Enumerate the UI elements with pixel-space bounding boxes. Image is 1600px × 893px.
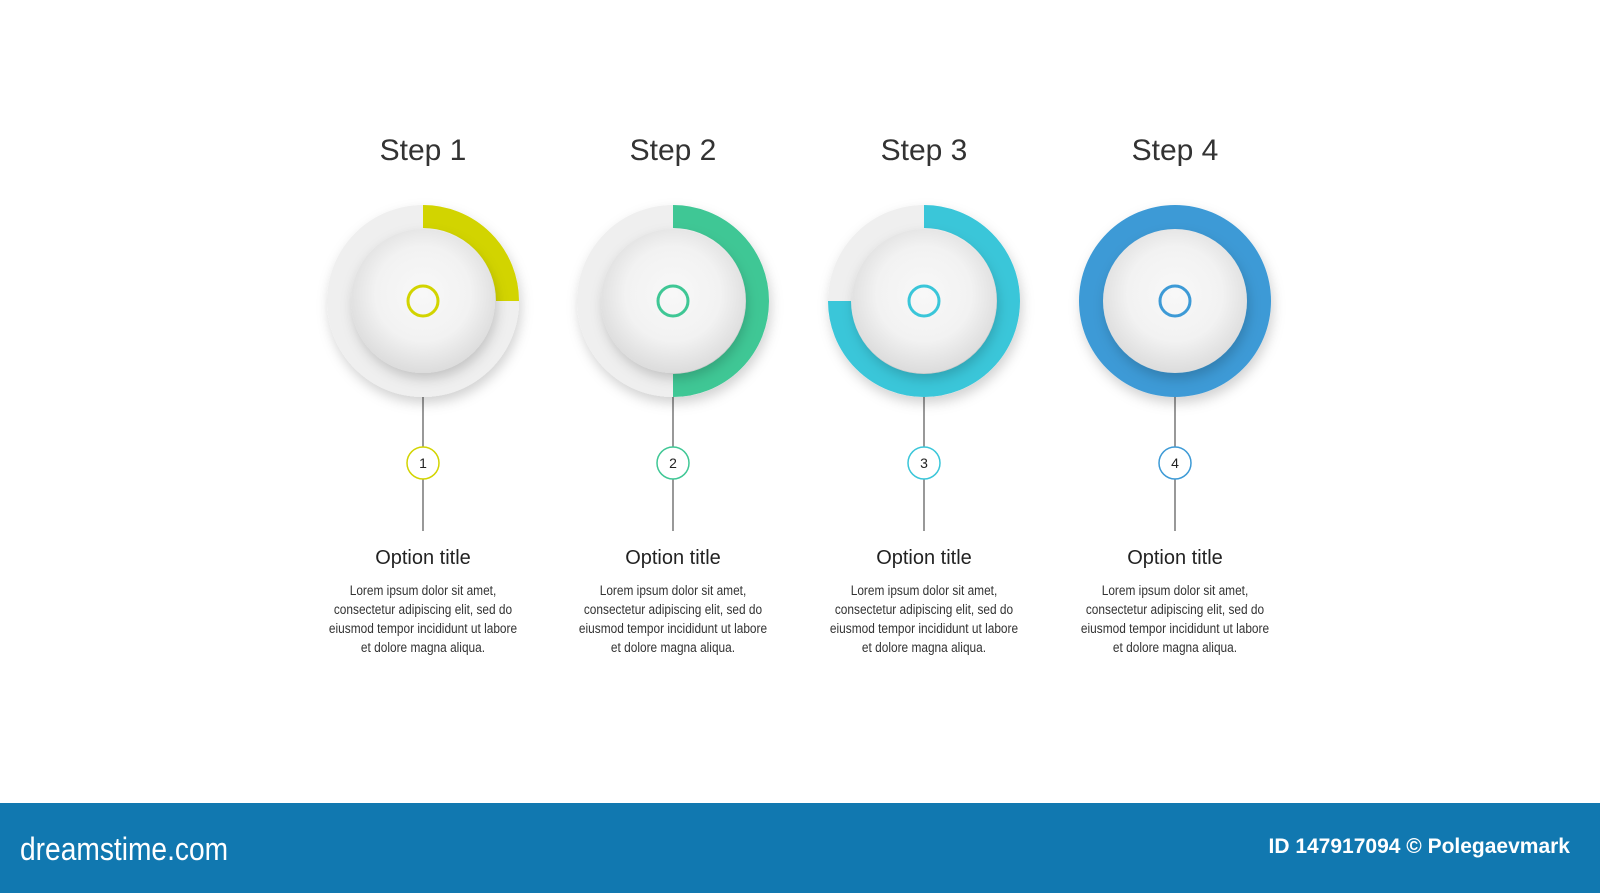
number badges: 4: [1171, 455, 1179, 471]
text: eiusmod tempor incididunt ut labore: [579, 621, 767, 636]
image id: ID 147917094 © Polegaevmark: [1268, 835, 1570, 858]
text: consectetur adipiscing elit, sed do: [1086, 602, 1264, 617]
body texts: [329, 583, 1269, 655]
text: Step 3: [881, 134, 967, 167]
connector lines: [423, 397, 1175, 531]
footer bar: [0, 803, 1600, 893]
circle 3: [828, 205, 1020, 397]
text: Step 2: [630, 134, 716, 167]
text: Option title: [876, 547, 972, 569]
circle 2: [577, 205, 769, 397]
text: et dolore magna aliqua.: [862, 640, 986, 655]
text: et dolore magna aliqua.: [611, 640, 735, 655]
step titles: [380, 134, 1218, 167]
text: eiusmod tempor incididunt ut labore: [1081, 621, 1269, 636]
option titles: [375, 547, 1223, 569]
number badges: 3: [920, 455, 928, 471]
text: Option title: [375, 547, 471, 569]
logo text: dreamstime.com: [20, 831, 228, 867]
text: consectetur adipiscing elit, sed do: [584, 602, 762, 617]
text: Option title: [1127, 547, 1223, 569]
text: Lorem ipsum dolor sit amet,: [600, 583, 746, 598]
text: eiusmod tempor incididunt ut labore: [830, 621, 1018, 636]
number badges: 2: [669, 455, 677, 471]
text: et dolore magna aliqua.: [1113, 640, 1237, 655]
text: et dolore magna aliqua.: [361, 640, 485, 655]
number badges: [407, 447, 1191, 479]
number badges: 1: [419, 455, 427, 471]
text: eiusmod tempor incididunt ut labore: [329, 621, 517, 636]
circle 4: [1079, 205, 1271, 397]
text: Lorem ipsum dolor sit amet,: [350, 583, 496, 598]
text: consectetur adipiscing elit, sed do: [835, 602, 1013, 617]
text: Lorem ipsum dolor sit amet,: [1102, 583, 1248, 598]
text: Lorem ipsum dolor sit amet,: [851, 583, 997, 598]
text: Step 4: [1132, 134, 1218, 167]
text: Step 1: [380, 134, 466, 167]
circle 1: [327, 205, 519, 397]
text: consectetur adipiscing elit, sed do: [334, 602, 512, 617]
text: Option title: [625, 547, 721, 569]
